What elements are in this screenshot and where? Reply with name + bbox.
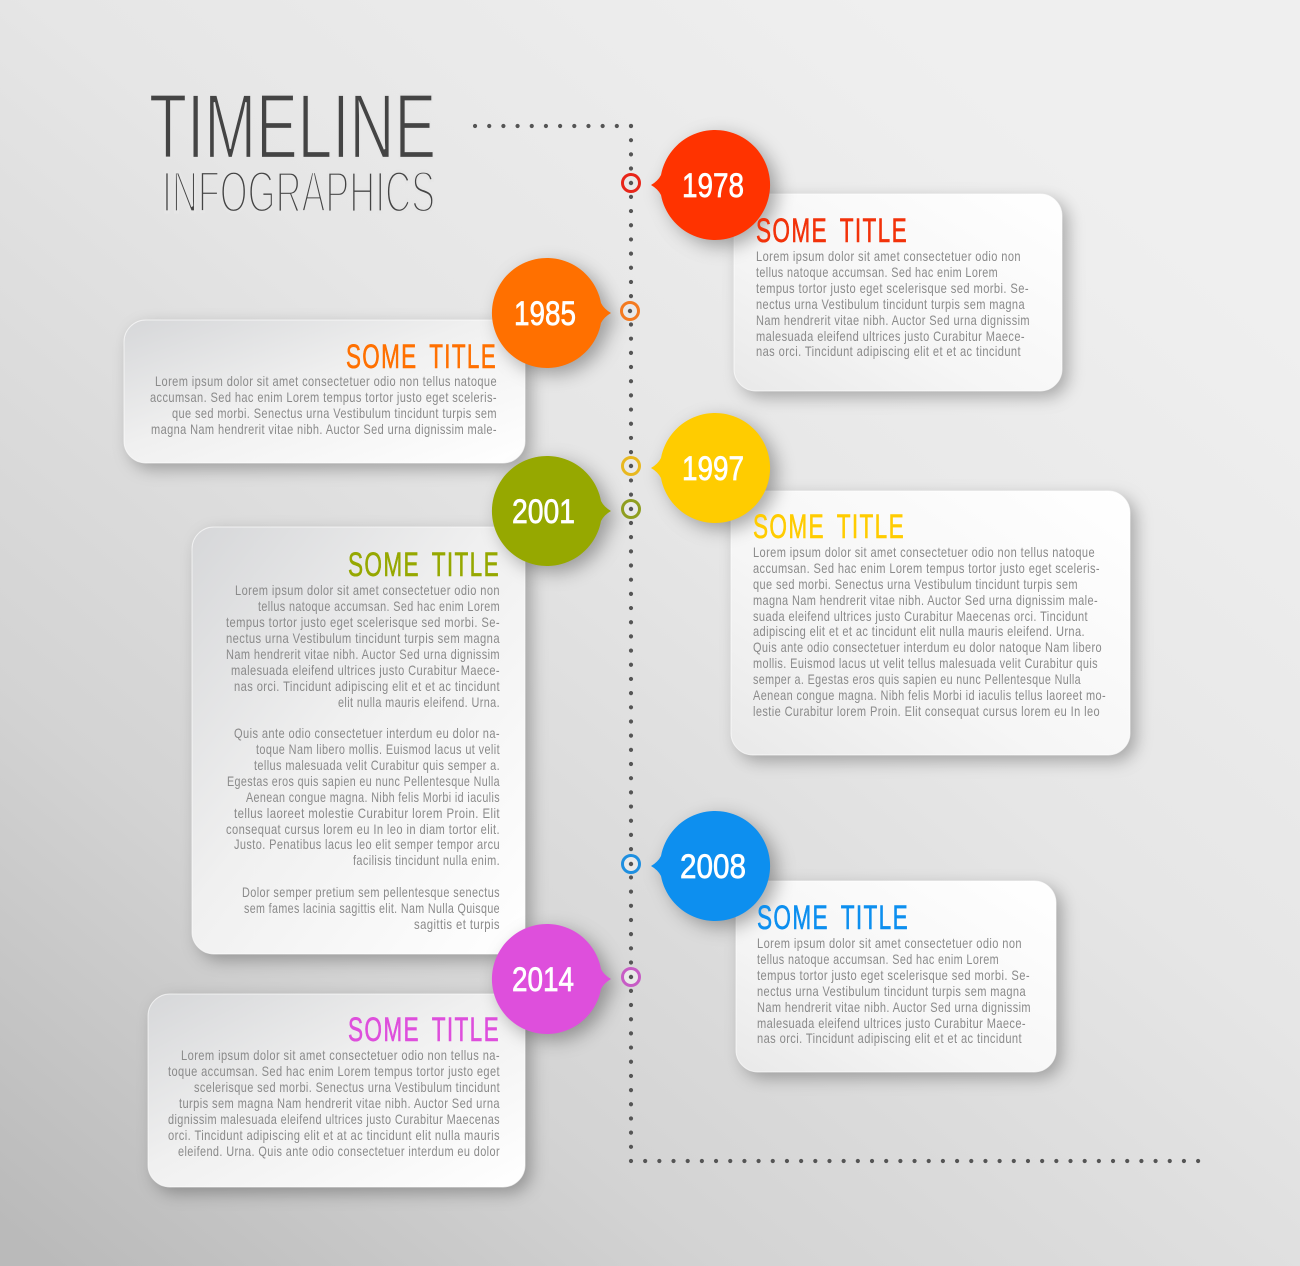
card text: nectus urna Vestibulum tincidunt turpis sem magna <box>226 630 500 646</box>
card <box>192 527 525 954</box>
year bubble <box>492 456 611 566</box>
card text: dignissim malesuada eleifend ultrices justo Curabitur Maecenas <box>168 1111 500 1127</box>
card text: malesuada eleifend ultrices justo Curabitur Maece- <box>756 328 1025 344</box>
card text: sem fames lacinia sagittis elit. Nam Nulla Quisque <box>244 900 500 916</box>
card text: Quis ante odio consectetuer interdum eu dolor na- <box>234 725 500 741</box>
card heading: SOME TITLE <box>757 899 909 937</box>
card text: tellus laoreet molestie Curabitur lorem Proin. Elit <box>234 805 500 821</box>
card text: mollis. Euismod lacus ut velit tellus malesuada velit Curabitur quis <box>753 655 1098 671</box>
panel: 2001 <box>192 456 640 954</box>
card text: tempus tortor justo eget scelerisque sed morbi. Se- <box>756 280 1029 296</box>
card <box>736 881 1056 1072</box>
year bubble: 1978 <box>682 167 744 205</box>
year bubble: 2001 <box>512 493 575 531</box>
card text: orci. Tincidunt adipiscing elit et at ac tincidunt elit nulla mauris <box>168 1127 500 1143</box>
card text: Dolor semper pretium sem pellentesque senectus <box>242 884 500 900</box>
subtitle: INFOGRAPHICS <box>162 160 435 225</box>
card text: accumsan. Sed hac enim Lorem tempus tortor justo eget sceleris- <box>150 389 497 405</box>
card text: suada eleifend ultrices justo Curabitur Maecenas orci. Tincidunt <box>753 608 1088 624</box>
timeline marker <box>622 174 640 192</box>
year bubble: 1985 <box>514 295 576 333</box>
card text <box>757 935 1031 1046</box>
panel: 1978 <box>622 130 1062 391</box>
year bubble <box>492 924 611 1034</box>
card text: tempus tortor justo eget scelerisque sed morbi. Se- <box>757 967 1030 983</box>
card text: Egestas eros quis sapien eu nunc Pellentesque Nulla <box>227 773 500 789</box>
card text: nectus urna Vestibulum tincidunt turpis sem magna <box>756 296 1025 312</box>
year bubble <box>651 413 770 523</box>
card text: Justo. Penatibus lacus leo elit semper tempor arcu <box>234 836 500 852</box>
panel: 1985 <box>124 258 638 463</box>
card text: Nam hendrerit vitae nibh. Auctor Sed urna dignissim <box>757 999 1031 1015</box>
card text <box>756 248 1030 359</box>
heading: timeline infographics <box>149 76 436 225</box>
card text: tellus natoque accumsan. Sed hac enim Lorem <box>757 951 999 967</box>
card <box>148 994 525 1187</box>
card text: nas orci. Tincidunt adipiscing elit et et ac tincidunt <box>757 1030 1022 1046</box>
card text <box>168 1047 500 1159</box>
card text <box>226 582 500 932</box>
card text: toque Nam libero mollis. Euismod lacus ut velit <box>256 741 500 757</box>
timeline marker <box>622 856 640 872</box>
year bubble <box>651 811 770 921</box>
timeline marker <box>622 302 638 320</box>
card heading: SOME TITLE <box>346 338 497 376</box>
card text: Lorem ipsum dolor sit amet consectetuer odio non tellus natoque <box>155 373 497 389</box>
timeline marker <box>622 458 640 474</box>
card text: Aenean congue magna. Nibh felis Morbi id iaculis <box>246 789 500 805</box>
year bubble <box>492 258 611 368</box>
card text <box>150 373 497 437</box>
card text: tellus malesuada velit Curabitur quis semper a. <box>254 757 500 773</box>
card heading: SOME TITLE <box>756 212 908 250</box>
card text: tellus natoque accumsan. Sed hac enim Lorem <box>258 598 500 614</box>
card text: Lorem ipsum dolor sit amet consectetuer odio non <box>235 582 500 598</box>
card <box>124 320 525 463</box>
card text: scelerisque sed morbi. Senectus urna Vestibulum tincidunt <box>194 1079 500 1095</box>
card text: Aenean congue magna. Nibh felis Morbi id iaculis tellus laoreet mo- <box>753 687 1106 703</box>
year bubble: 2008 <box>680 848 746 886</box>
card text: Lorem ipsum dolor sit amet consectetuer odio non <box>757 935 1022 951</box>
title: TIMELINE <box>149 76 436 178</box>
card <box>734 194 1062 391</box>
year bubble: 1997 <box>682 450 744 488</box>
card text: eleifend. Urna. Quis ante odio consectetuer interdum eu dolor <box>178 1143 500 1159</box>
card text: adipiscing elit et et ac tincidunt elit nulla mauris eleifend. Urna. <box>753 623 1085 639</box>
card heading: SOME TITLE <box>348 1011 500 1049</box>
card text: nectus urna Vestibulum tincidunt turpis sem magna <box>757 983 1026 999</box>
card text: que sed morbi. Senectus urna Vestibulum tincidunt turpis sem <box>753 576 1078 592</box>
card text: lestie Curabitur lorem Proin. Elit consequat cursus lorem eu In leo <box>753 703 1100 719</box>
card <box>731 491 1130 755</box>
card text: nas orci. Tincidunt adipiscing elit et et ac tincidunt <box>234 678 500 694</box>
card text: toque accumsan. Sed hac enim Lorem tempus tortor justo eget <box>168 1063 500 1079</box>
year bubble: 2014 <box>512 961 574 999</box>
card heading: SOME TITLE <box>348 546 500 584</box>
card text: sagittis et turpis <box>414 916 500 932</box>
card text <box>753 544 1106 719</box>
card text: malesuada eleifend ultrices justo Curabitur Maece- <box>757 1015 1026 1031</box>
card heading: SOME TITLE <box>753 508 905 546</box>
year bubble <box>651 130 770 240</box>
card text: tellus natoque accumsan. Sed hac enim Lorem <box>756 264 998 280</box>
card text: que sed morbi. Senectus urna Vestibulum tincidunt turpis sem <box>172 405 497 421</box>
panel: 2008 <box>622 811 1056 1072</box>
card text: Quis ante odio consectetuer interdum eu dolor natoque Nam libero <box>753 639 1102 655</box>
card text: tempus tortor justo eget scelerisque sed morbi. Se- <box>226 614 500 630</box>
card text: magna Nam hendrerit vitae nibh. Auctor Sed urna dignissim male- <box>753 592 1098 608</box>
card text: Lorem ipsum dolor sit amet consectetuer odio non <box>756 248 1021 264</box>
card text: malesuada eleifend ultrices justo Curabitur Maece- <box>231 662 500 678</box>
card text: semper a. Egestas eros quis sapien eu nunc Pellentesque Nulla <box>753 671 1081 687</box>
card text: Nam hendrerit vitae nibh. Auctor Sed urna dignissim <box>226 646 500 662</box>
card text: Nam hendrerit vitae nibh. Auctor Sed urna dignissim <box>756 312 1030 328</box>
panel: 1997 <box>622 413 1130 755</box>
panel: 2014 <box>148 924 640 1187</box>
card text: nas orci. Tincidunt adipiscing elit et et ac tincidunt <box>756 343 1021 359</box>
card text: accumsan. Sed hac enim Lorem tempus tortor justo eget sceleris- <box>753 560 1100 576</box>
card text: consequat cursus lorem eu In leo in diam tortor elit. <box>226 821 500 837</box>
card text: Lorem ipsum dolor sit amet consectetuer odio non tellus natoque <box>753 544 1095 560</box>
card text: turpis sem magna Nam hendrerit vitae nibh. Auctor Sed urna <box>179 1095 500 1111</box>
card text: magna Nam hendrerit vitae nibh. Auctor Sed urna dignissim male- <box>151 421 497 437</box>
card text: facilisis tincidunt nulla enim. <box>353 852 500 868</box>
timeline marker <box>622 968 640 986</box>
dotted timeline <box>473 126 1199 1161</box>
card text: elit nulla mauris eleifend. Urna. <box>338 694 500 710</box>
card text: Lorem ipsum dolor sit amet consectetuer odio non tellus na- <box>181 1047 500 1063</box>
timeline marker <box>622 500 640 518</box>
